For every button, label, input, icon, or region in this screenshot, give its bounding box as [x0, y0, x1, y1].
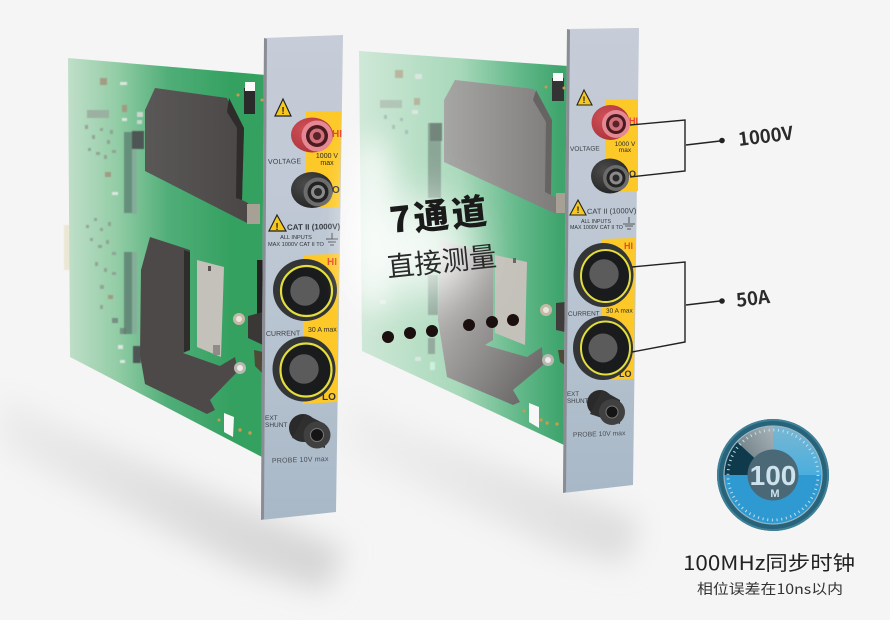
board components [85, 78, 143, 363]
label: LO voltage: O [332, 185, 340, 196]
BNC probe connector [289, 414, 330, 448]
orange pads [218, 94, 264, 435]
black shield edge [227, 98, 244, 200]
leader: 50A [632, 262, 725, 352]
label: ext shunt: SHUNT [265, 422, 287, 429]
yellow strip: current [602, 238, 635, 380]
yellow strip: current [303, 254, 339, 404]
ellipsis dots: hidden channels [382, 314, 519, 343]
ground symbol [326, 233, 338, 245]
CAT II warning: ! [576, 205, 580, 215]
subheading: direct measurement: 直接测量 [385, 234, 498, 285]
black bracket near panel [556, 302, 565, 365]
shield: upper [444, 80, 557, 214]
CAT II warning: CAT II (1000V) [587, 206, 637, 216]
screws [540, 304, 552, 316]
connector strips [124, 130, 144, 363]
label: all inputs [268, 235, 325, 248]
top left grey wedge [737, 426, 773, 475]
ground symbol [623, 217, 635, 229]
warning triangle [577, 90, 592, 105]
red voltage jack [291, 118, 333, 152]
white glow left [348, 135, 396, 315]
current jack: LO [272, 336, 336, 402]
warning triangle: ! [281, 106, 285, 117]
label: probe: PROBE 10V max [272, 456, 329, 465]
silver clip [495, 255, 527, 345]
circuit board [359, 51, 568, 445]
black bracket near panel [248, 260, 263, 374]
label: 30A max: 30 A max [308, 326, 337, 334]
panel edge [563, 29, 570, 493]
label: 1000 V max: max [619, 147, 632, 154]
label: 1000 V max: max [320, 160, 334, 167]
shadow: left card [0, 395, 345, 592]
label: all inputs: MAX 1000V CAT II TO [570, 225, 623, 231]
label: ext shunt [265, 415, 287, 429]
dial ticks [728, 430, 818, 520]
black voltage jack [291, 172, 333, 208]
label: current: CURRENT [568, 310, 600, 318]
label: all inputs: MAX 1000V CAT II TO [268, 242, 325, 248]
dial rim [724, 426, 822, 524]
label: HI current: HI [624, 241, 633, 251]
label: LO voltage: O [629, 169, 636, 179]
label: all inputs: ALL INPUTS [581, 219, 612, 225]
shield: lower [438, 240, 543, 405]
top right quadrant [773, 426, 822, 475]
edge pins [64, 225, 74, 270]
card: right module [348, 28, 639, 493]
current jack: LO [573, 316, 633, 380]
label: LO: LO [619, 369, 632, 379]
board components [380, 70, 435, 370]
card: left module [64, 35, 343, 520]
label: 1000 V max: 1000 V [316, 153, 338, 160]
label: 50A: 50A [735, 283, 771, 313]
CAT II warning: CAT II (1000V) [287, 222, 341, 232]
label: ext shunt: EXT [567, 391, 579, 398]
white tab [529, 403, 539, 428]
heading: 7 channels: 7通道 [387, 183, 492, 244]
front panel [563, 28, 639, 493]
dark wedge [724, 442, 773, 475]
value: 100 [750, 460, 796, 491]
warning triangle [275, 99, 291, 117]
label: all inputs: ALL INPUTS [280, 235, 312, 241]
caption: phase error: 相位误差在10ns以内 [697, 579, 843, 599]
gauge icon: 100M clock [717, 419, 829, 531]
label: HI current: HI [327, 257, 337, 268]
current jack: HI [273, 259, 337, 321]
connector strip [428, 123, 442, 354]
label: ext shunt [567, 391, 589, 405]
yellow strip: voltage [605, 99, 638, 193]
white tab [224, 413, 234, 437]
label: all inputs [570, 219, 623, 231]
outer ring [717, 419, 829, 531]
label: HI voltage: HI [629, 116, 638, 126]
current jack: HI [574, 243, 634, 307]
chips [244, 88, 255, 114]
yellow strip: voltage [306, 111, 341, 208]
label: 1000V: 1000V [737, 119, 795, 152]
chip [552, 78, 564, 101]
front panel [261, 35, 343, 520]
label: probe: PROBE 10V max [573, 430, 626, 439]
warning triangle: ! [582, 95, 586, 105]
orange pads [522, 86, 566, 426]
shadow: right card [345, 395, 640, 565]
caption: 100MHz sync clock: 100MHz同步时钟 [683, 547, 855, 576]
shield: upper [145, 88, 248, 223]
label: 1000 V max [615, 141, 636, 154]
label: 30A max: 30 A max [606, 308, 634, 315]
black voltage jack [591, 158, 629, 194]
label: HI voltage: HI [332, 129, 342, 140]
label: ext shunt: SHUNT [567, 398, 589, 405]
label: 1000 V max: 1000 V [615, 141, 636, 148]
label: voltage: VOLTAGE [570, 145, 600, 153]
shield: lower [140, 237, 238, 414]
label: voltage: VOLTAGE [268, 158, 302, 166]
unit: M [770, 488, 780, 500]
circuit board [68, 58, 266, 457]
label: LO: LO [322, 392, 336, 403]
silver spring clip [197, 260, 224, 357]
inner dial [724, 426, 822, 524]
label: ext shunt: EXT [265, 415, 278, 422]
label: current: CURRENT [266, 330, 301, 338]
panel edge [261, 38, 267, 520]
hub [748, 450, 798, 500]
CAT II warning [570, 200, 637, 216]
white glow behind title [366, 202, 470, 294]
leader: 1000V [630, 120, 725, 177]
BNC probe connector [587, 390, 625, 425]
CAT II warning: ! [275, 222, 279, 233]
screws [233, 313, 245, 325]
CAT II warning [269, 215, 341, 233]
label: 1000 V max [316, 153, 338, 167]
red voltage jack [592, 105, 630, 140]
